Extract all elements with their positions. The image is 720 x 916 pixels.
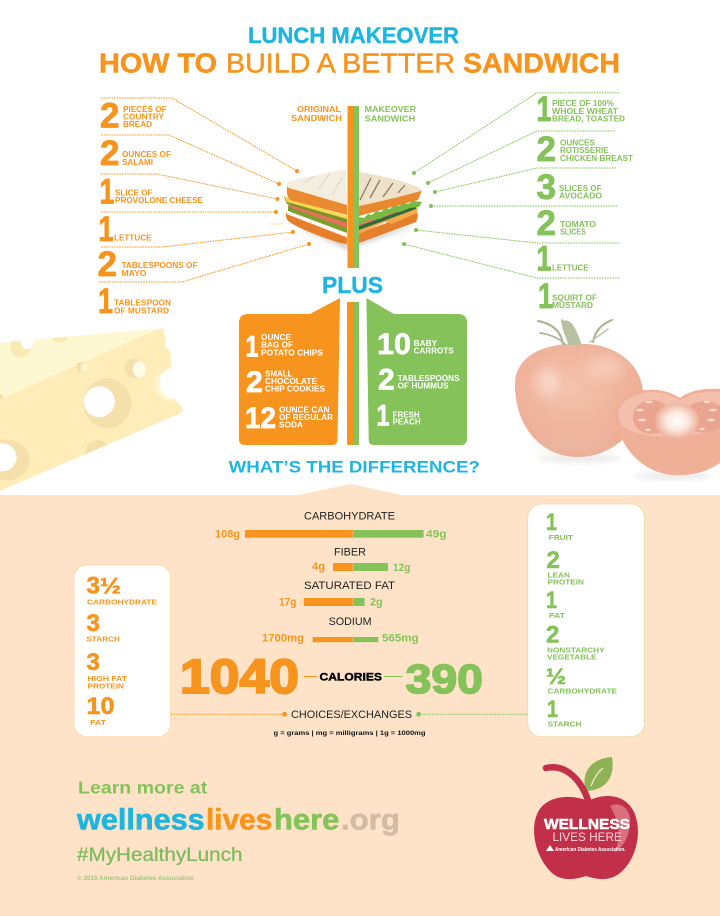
heading: makeover sandwich: MAKEOVER [365, 105, 417, 114]
item: 2 tablespoons of hummus: TABLESPOONS [398, 374, 460, 383]
item: 12 ounce can of regular soda: 12 [245, 402, 276, 435]
lower divider bar [347, 302, 359, 445]
item: 2 ounces of salami: SALAMI [122, 158, 153, 167]
title: how to build a better sandwich: BUILD A BETTER [226, 48, 455, 78]
item: 3 slices of avocado [536, 168, 602, 207]
item: 2 pieces of country bread: COUNTRY [123, 113, 165, 122]
item: 10 baby carrots [377, 328, 454, 361]
item: 1 ounce bag of potato chips: POTATO CHIPS [261, 348, 323, 357]
item: 2 tomato slices: 2 [536, 204, 556, 243]
logo: wellness lives here apple: LIVES HERE [552, 832, 622, 844]
left half [286, 212, 347, 244]
chart: carbohydrate comparison [215, 511, 446, 541]
heading: original sandwich: ORIGINAL [297, 105, 341, 114]
chart: fiber comparison: 4g [312, 561, 325, 573]
item: 3 starch: 3 [86, 610, 100, 637]
item: 1 tablespoon of mustard: OF MUSTARD [114, 306, 169, 315]
item: 3 and a half carbohydrate [86, 572, 157, 606]
right ingredient list: makeover sandwich [536, 90, 633, 316]
item: 2 ounces of salami: OUNCES OF [122, 150, 171, 159]
item: 3 high fat protein [86, 649, 128, 691]
right dotted leader lines [402, 93, 619, 278]
item: 10 baby carrots: BABY [414, 339, 438, 348]
peach background section [0, 484, 720, 916]
chart: sodium comparison: 1700mg [262, 633, 304, 645]
item: 3 starch: STARCH [86, 634, 120, 643]
item: 1 fat: 1 [546, 587, 557, 614]
item: 1 ounce bag of potato chips: OUNCE [261, 333, 291, 342]
item: 2 nonstarchy vegetable: VEGETABLE [547, 653, 597, 662]
item: 1 ounce bag of potato chips [246, 330, 323, 364]
unit legend: g = grams | mg = milligrams | 1g = 1000mg [274, 730, 426, 737]
item: 1 lettuce: LETTUCE [552, 263, 588, 272]
calories comparison: CALORIES [320, 671, 382, 683]
item: half carbohydrate: ½ [546, 664, 566, 689]
choices and exchanges connector [171, 709, 528, 721]
calories comparison [180, 651, 483, 704]
item: 1 starch: 1 [547, 696, 558, 723]
item: 1 piece of whole wheat bread [536, 90, 625, 129]
item: 1 lettuce [98, 210, 152, 249]
choices and exchanges connector: CHOICES/EXCHANGES [291, 709, 412, 721]
apple leaf [584, 757, 613, 791]
chart: fiber comparison: 12g [393, 562, 410, 574]
title: lunch makeover: LUNCH MAKEOVER [248, 23, 459, 48]
item: half carbohydrate [546, 664, 617, 695]
item: 2 lean protein [546, 547, 584, 586]
item: 3 slices of avocado: 3 [536, 168, 556, 207]
item: 1 fruit [546, 509, 574, 542]
item: 1 starch: STARCH [548, 719, 582, 728]
chart: saturated fat comparison [279, 580, 395, 609]
item: 1 tablespoon of mustard: TABLESPOON [114, 299, 171, 308]
chart: saturated fat comparison: 17g [279, 597, 296, 609]
cut tomato half [615, 389, 720, 475]
item: 1 squirt of mustard [538, 277, 597, 316]
item: 2 tablespoons of hummus: OF HUMMUS [398, 381, 449, 390]
apple body [534, 796, 638, 879]
item: 1 fruit: FRUIT [549, 533, 574, 542]
item: 2 tomato slices [536, 204, 596, 243]
chart: sodium comparison: SODIUM [329, 616, 372, 628]
chart: fiber comparison: FIBER [334, 546, 366, 558]
item: 2 lean protein: 2 [546, 547, 560, 574]
item: 2 small chocolate chip cookies: CHIP COOKIES [265, 384, 325, 393]
item: 1 lettuce: 1 [536, 240, 552, 278]
item: 1 squirt of mustard: 1 [538, 277, 553, 316]
item: 2 pieces of country bread: PIECES OF [123, 105, 167, 114]
item: 2 lean protein: LEAN [548, 570, 570, 579]
heading: what's the difference: WHAT’S THE DIFFERENCE? [229, 458, 480, 477]
item: 12 ounce can of regular soda: OUNCE CAN [279, 405, 330, 414]
heading: makeover sandwich [365, 105, 417, 124]
item: 1 lettuce [536, 240, 588, 278]
title: how to build a better sandwich: HOW TO [99, 48, 217, 78]
copyright: © 2015 American Diabetes Association [77, 875, 194, 882]
chart: carbohydrate comparison: 49g [426, 529, 446, 541]
item: 2 tablespoons of mayo: 2 [98, 245, 117, 284]
website url: here [274, 803, 339, 836]
illustration: sandwich [270, 169, 422, 250]
item: 2 tomato slices: TOMATO [560, 220, 596, 229]
logo: wellness lives here apple: WELLNESS [544, 816, 630, 833]
tomato stem [538, 320, 612, 345]
item: 10 fat: 10 [86, 693, 114, 720]
item: 1 tablespoon of mustard: 1 [98, 282, 113, 321]
item: 2 ounces rotisserie chicken breast: CHICKEN BREAST [560, 154, 633, 163]
hashtag: #MyHealthyLunch [77, 844, 242, 866]
item: 3 and a half carbohydrate: CARBOHYDRATE [87, 597, 157, 606]
calories comparison: 1040 [180, 651, 299, 704]
item: 2 small chocolate chip cookies: CHOCOLATE [265, 377, 317, 386]
panel: makeover exchanges [528, 504, 644, 737]
item: 1 piece of whole wheat bread: BREAD, TOASTED [552, 114, 625, 124]
item: 10 baby carrots: 10 [377, 328, 411, 361]
chart: saturated fat comparison: SATURATED FAT [304, 580, 395, 592]
heading: plus: PLUS [322, 272, 383, 298]
item: 2 ounces rotisserie chicken breast [536, 130, 633, 169]
left dotted leader lines [99, 98, 311, 282]
item: 1 fat: FAT [549, 611, 566, 620]
item: 3 and a half carbohydrate: 3 [86, 572, 100, 600]
item: 2 small chocolate chip cookies: SMALL [265, 369, 293, 378]
panel: makeover sides [366, 298, 467, 445]
item: 1 squirt of mustard: SQUIRT OF [552, 294, 597, 302]
panel: original exchanges [74, 565, 171, 737]
item: 3 high fat protein: 3 [86, 649, 100, 676]
learn more text: Learn more at [78, 778, 207, 798]
item: 2 small chocolate chip cookies [246, 366, 325, 399]
item: 1 fresh peach: 1 [376, 400, 390, 432]
chart: carbohydrate comparison: 108g [215, 529, 240, 541]
item: 1 lettuce: 1 [98, 210, 114, 249]
item: 1 fresh peach [376, 400, 421, 432]
item: 12 ounce can of regular soda [245, 402, 333, 435]
logo: wellness lives here apple [534, 757, 638, 879]
item: 1 ounce bag of potato chips: BAG OF [261, 341, 293, 350]
item: 2 ounces of salami: 2 [100, 134, 119, 173]
item: 10 baby carrots: CARROTS [414, 347, 454, 356]
item: 3 slices of avocado: AVOCADO [559, 191, 602, 200]
item: 3 high fat protein: HIGH FAT [88, 674, 128, 683]
item: 1 fresh peach: FRESH [393, 410, 420, 419]
chart: carbohydrate comparison: CARBOHYDRATE [304, 511, 395, 523]
right half [359, 212, 418, 243]
item: 1 slice of provolone cheese: 1 [100, 172, 114, 212]
item: 1 tablespoon of mustard [98, 282, 171, 321]
title: how to build a better sandwich: SANDWICH [463, 48, 620, 78]
item: 12 ounce can of regular soda: SODA [279, 421, 303, 430]
item: 1 starch [547, 696, 582, 728]
item: 2 nonstarchy vegetable: NONSTARCHY [547, 645, 605, 654]
item: 2 tablespoons of mayo: TABLESPOONS OF [122, 261, 198, 270]
item: 2 tablespoons of hummus: 2 [378, 364, 395, 396]
item: 1 piece of whole wheat bread: PIECE OF 100% [552, 99, 614, 108]
item: 1 squirt of mustard: MUSTARD [552, 301, 593, 310]
calories comparison: 390 [406, 656, 483, 702]
chart: saturated fat comparison: 2g [370, 597, 383, 609]
title: how to build a better sandwich [99, 48, 620, 78]
item: 2 tablespoons of mayo: MAYO [122, 269, 146, 278]
item: 2 nonstarchy vegetable: 2 [546, 622, 559, 649]
item: 10 fat: FAT [90, 718, 107, 727]
item: 2 tomato slices: SLICES [560, 228, 586, 237]
center divider bar: orange and green [348, 106, 359, 268]
item: 1 ounce bag of potato chips: 1 [246, 330, 258, 364]
item: 2 ounces rotisserie chicken breast: 2 [536, 130, 556, 169]
item: 3 high fat protein: PROTEIN [88, 682, 124, 691]
item: 2 tablespoons of mayo [98, 245, 198, 284]
chart: sodium comparison [262, 616, 419, 645]
item: 2 nonstarchy vegetable [546, 622, 605, 662]
item: half carbohydrate: CARBOHYDRATE [548, 686, 617, 695]
item: 1 slice of provolone cheese: PROVOLONE CHEESE [115, 196, 203, 205]
item: 1 slice of provolone cheese: SLICE OF [115, 188, 153, 197]
chart: sodium comparison: 565mg [382, 633, 419, 645]
item: 2 tablespoons of hummus [378, 364, 460, 396]
item: 2 ounces of salami [100, 134, 171, 173]
logo: wellness lives here apple: American Diabetes Association. [555, 847, 626, 853]
item: 2 pieces of country bread [100, 96, 167, 136]
website url [76, 803, 400, 836]
item: 1 slice of provolone cheese [100, 172, 203, 212]
website url: wellness [76, 803, 205, 836]
item: 1 fat [546, 587, 566, 620]
chart: fiber comparison [312, 546, 410, 574]
item: 3 slices of avocado: SLICES OF [559, 184, 602, 193]
illustration: tomatoes [515, 320, 720, 480]
item: 3 starch [86, 610, 120, 643]
item: 1 fruit: 1 [546, 509, 557, 536]
website url: lives [206, 803, 272, 836]
illustration: cheese wedge [0, 328, 190, 500]
heading: original sandwich: SANDWICH [291, 114, 342, 123]
item: 2 small chocolate chip cookies: 2 [246, 366, 263, 399]
item: 3 and a half carbohydrate: ½ [100, 574, 121, 598]
item: 12 ounce can of regular soda: OF REGULAR [279, 413, 333, 422]
item: 2 pieces of country bread: BREAD [123, 120, 152, 129]
item: 2 ounces rotisserie chicken breast: OUNCES [560, 138, 595, 148]
whole tomato [515, 344, 643, 457]
left ingredient list: original sandwich [98, 96, 203, 321]
website url: .org [341, 803, 400, 836]
heading: makeover sandwich: SANDWICH [365, 114, 416, 124]
item: 2 pieces of country bread: 2 [100, 96, 119, 136]
item: 1 piece of whole wheat bread: 1 [536, 90, 552, 129]
item: 2 lean protein: PROTEIN [548, 578, 584, 586]
item: 1 piece of whole wheat bread: WHOLE WHEAT [552, 107, 618, 116]
item: 2 ounces rotisserie chicken breast: ROTISSERIE [560, 146, 609, 155]
item: 1 fresh peach: PEACH [393, 418, 421, 427]
panel: original sides [239, 298, 340, 445]
item: 1 lettuce: LETTUCE [114, 234, 152, 242]
heading: original sandwich [291, 105, 342, 123]
apple stem [546, 767, 588, 800]
